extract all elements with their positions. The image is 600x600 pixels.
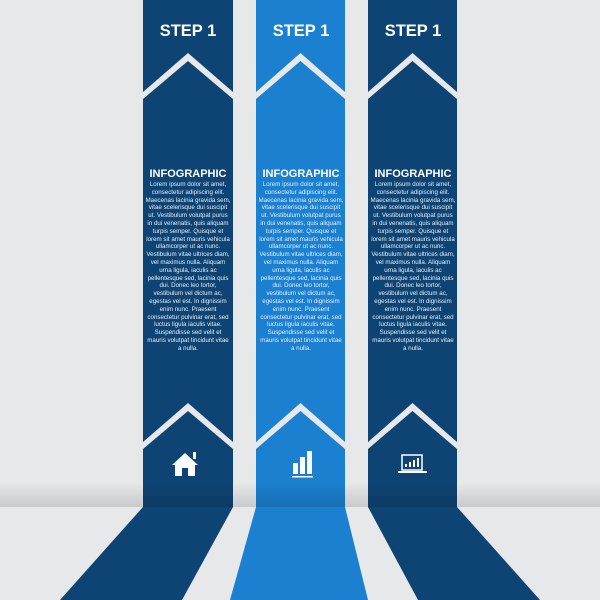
text block middle: ullamcorper ut ac nunc.	[269, 243, 333, 250]
text block right: ut. Vestibulum volutpat purus	[373, 212, 453, 219]
text block left: dui. Donec leo tortor,	[159, 282, 217, 289]
text block left: pellentesque sed, lacinia quis	[148, 275, 228, 282]
text block left: vel maximus nulla. Aliquam	[151, 259, 225, 266]
text block right: consectetur adipiscing elit.	[377, 189, 449, 196]
text block left: enim nunc. Praesent	[160, 306, 216, 313]
text block left: mauris volutpat tincidunt vitae	[147, 337, 229, 344]
text block middle: consectetur pulvinar erat, sed	[260, 314, 342, 321]
text block right: a nulla.	[403, 345, 423, 352]
text block middle: Lorem ipsum dolor sit amet,	[263, 181, 339, 188]
icon: bar chart	[292, 451, 313, 478]
text block right: luctus ligula iaculis vitae.	[379, 321, 447, 328]
text block left: in dui venenatis, quis aliquam	[147, 220, 229, 227]
text block middle: ut. Vestibulum volutpat purus	[261, 212, 341, 219]
text block middle: urna ligula, iaculis ac	[272, 267, 330, 274]
text block middle: dui. Donec leo tortor,	[272, 282, 330, 289]
text block right	[371, 168, 455, 352]
text block right: Suspendisse sed velit et	[380, 329, 446, 336]
text block right: mauris volutpat tincidunt vitae	[372, 337, 454, 344]
text block right: Maecenas lacinia gravida sem,	[371, 197, 455, 204]
text block left	[146, 168, 230, 352]
text block middle: a nulla.	[291, 345, 311, 352]
text block middle: vestibulum vel dictum ac,	[266, 290, 336, 297]
text block right: turpis semper. Quisque et	[378, 228, 448, 235]
text block right: vitae scelerisque dui suscipit	[374, 204, 452, 211]
text block left: Maecenas lacinia gravida sem,	[146, 197, 230, 204]
text block left: a nulla.	[178, 345, 198, 352]
text block middle: lorem sit amet mauris vehicula	[259, 236, 343, 243]
text block right: consectetur pulvinar erat, sed	[372, 314, 454, 321]
text block left: ullamcorper ut ac nunc.	[156, 243, 220, 250]
text block right: urna ligula, iaculis ac	[384, 267, 442, 274]
text block right: Vestibulum vitae ultrices diam,	[371, 251, 455, 258]
text block right: enim nunc. Praesent	[385, 306, 441, 313]
text block middle: vitae scelerisque dui suscipit	[262, 204, 340, 211]
text block right: vel maximus nulla. Aliquam	[376, 259, 450, 266]
text block middle: consectetur adipiscing elit.	[265, 189, 337, 196]
text block middle: mauris volutpat tincidunt vitae	[260, 337, 342, 344]
heading step right: STEP 1	[385, 22, 441, 40]
floor stripe middle	[230, 507, 368, 600]
text block right: INFOGRAPHIC	[374, 168, 452, 180]
text block middle: Vestibulum vitae ultrices diam,	[259, 251, 343, 258]
column middle	[256, 0, 345, 507]
text block right: Lorem ipsum dolor sit amet,	[375, 181, 451, 188]
text block left: egestas vel est. In dignissim	[149, 298, 227, 305]
text block middle: enim nunc. Praesent	[273, 306, 329, 313]
text block middle: pellentesque sed, lacinia quis	[261, 275, 341, 282]
text block left: INFOGRAPHIC	[150, 168, 226, 180]
text block right: pellentesque sed, lacinia quis	[373, 275, 453, 282]
text block left: vitae scelerisque dui suscipit	[149, 204, 227, 211]
floor stripe right	[368, 507, 540, 600]
text block middle: INFOGRAPHIC	[262, 168, 340, 180]
text block left: luctus ligula iaculis vitae.	[154, 321, 222, 328]
text block left: consectetur pulvinar erat, sed	[147, 314, 229, 321]
icon: house	[172, 452, 198, 476]
text block middle: Maecenas lacinia gravida sem,	[259, 197, 343, 204]
text block left: consectetur adipiscing elit.	[152, 189, 224, 196]
text block middle: vel maximus nulla. Aliquam	[264, 259, 338, 266]
text block left: urna ligula, iaculis ac	[159, 267, 217, 274]
floor stripe left	[60, 507, 233, 600]
text block middle: in dui venenatis, quis aliquam	[260, 220, 342, 227]
text block left: vestibulum vel dictum ac,	[153, 290, 223, 297]
text block left: turpis semper. Quisque et	[153, 228, 223, 235]
text block middle	[259, 168, 343, 352]
text block left: lorem sit amet mauris vehicula	[146, 236, 230, 243]
text block middle: turpis semper. Quisque et	[266, 228, 336, 235]
text block right: vestibulum vel dictum ac,	[378, 290, 448, 297]
column left	[143, 0, 233, 507]
heading step middle: STEP 1	[273, 22, 329, 40]
text block left: ut. Vestibulum volutpat purus	[148, 212, 228, 219]
heading step left: STEP 1	[160, 22, 216, 40]
text block right: lorem sit amet mauris vehicula	[371, 236, 455, 243]
text block right: dui. Donec leo tortor,	[384, 282, 442, 289]
text block right: egestas vel est. In dignissim	[374, 298, 452, 305]
text block left: Vestibulum vitae ultrices diam,	[146, 251, 230, 258]
text block right: ullamcorper ut ac nunc.	[381, 243, 445, 250]
column right	[368, 0, 457, 507]
text block right: in dui venenatis, quis aliquam	[372, 220, 454, 227]
text block left: Lorem ipsum dolor sit amet,	[150, 181, 226, 188]
icon: laptop	[398, 455, 427, 473]
text block middle: egestas vel est. In dignissim	[262, 298, 340, 305]
text block middle: luctus ligula iaculis vitae.	[267, 321, 335, 328]
text block left: Suspendisse sed velit et	[155, 329, 221, 336]
text block middle: Suspendisse sed velit et	[268, 329, 334, 336]
